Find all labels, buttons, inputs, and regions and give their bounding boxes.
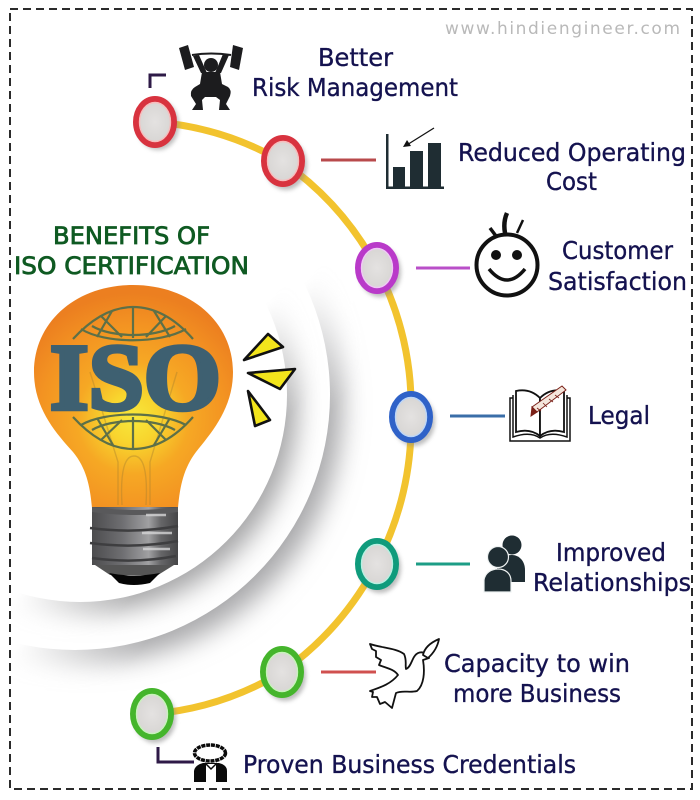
ISO letters: ISO [50,326,221,430]
node: legal [392,394,435,446]
label: customer satisfaction: Satisfaction [548,267,687,296]
label: improved relationships: Relationships [533,568,691,597]
label: capacity to win more business [444,649,630,708]
icon: two people [484,536,525,592]
label: legal: Legal [588,401,650,430]
node: operating cost [264,138,307,190]
watermark: www.hindiengineer.com [445,19,680,39]
label: customer satisfaction [548,236,687,296]
label: better risk management [252,43,458,102]
curved timeline [152,122,411,714]
title: BENEFITS OF [53,222,210,250]
label: proven business credentials: Proven Business Credentials [243,750,576,779]
icon: weightlifter [179,45,243,110]
icon: bar chart with arrow [386,128,444,189]
icon: business man with cloud head [194,745,227,782]
bulb glass [34,285,233,508]
node: capacity [263,649,306,701]
title [14,222,249,280]
filament [90,372,177,505]
icon: open book with pencil [510,386,570,441]
label: capacity to win more business: Capacity to win [444,649,630,678]
background discs [32,298,358,677]
icon: dove with leaf [370,639,439,708]
icon: ISO light bulb [34,285,233,585]
label: better risk management: Risk Management [252,73,458,102]
node: credentials [133,691,176,743]
label: reduced operating cost [458,138,686,196]
node: risk management [136,99,179,150]
label: capacity to win more business: more Business [453,679,621,708]
label: better risk management: Better [318,43,394,72]
screw base [90,507,178,585]
title: ISO CERTIFICATION [14,252,249,280]
icon: bulb sparks [244,334,295,426]
globe top [73,307,193,340]
node: relationships [358,541,401,593]
label: reduced operating cost: Cost [546,167,597,196]
icon: smiley face [476,213,538,296]
label: improved relationships [533,538,691,597]
label: reduced operating cost: Reduced Operating [458,138,686,167]
label: customer satisfaction: Customer [562,236,674,265]
label: improved relationships: Improved [556,538,666,567]
globe bottom [73,414,193,449]
node: customer satisfaction [358,245,401,297]
connector lines [150,75,505,762]
